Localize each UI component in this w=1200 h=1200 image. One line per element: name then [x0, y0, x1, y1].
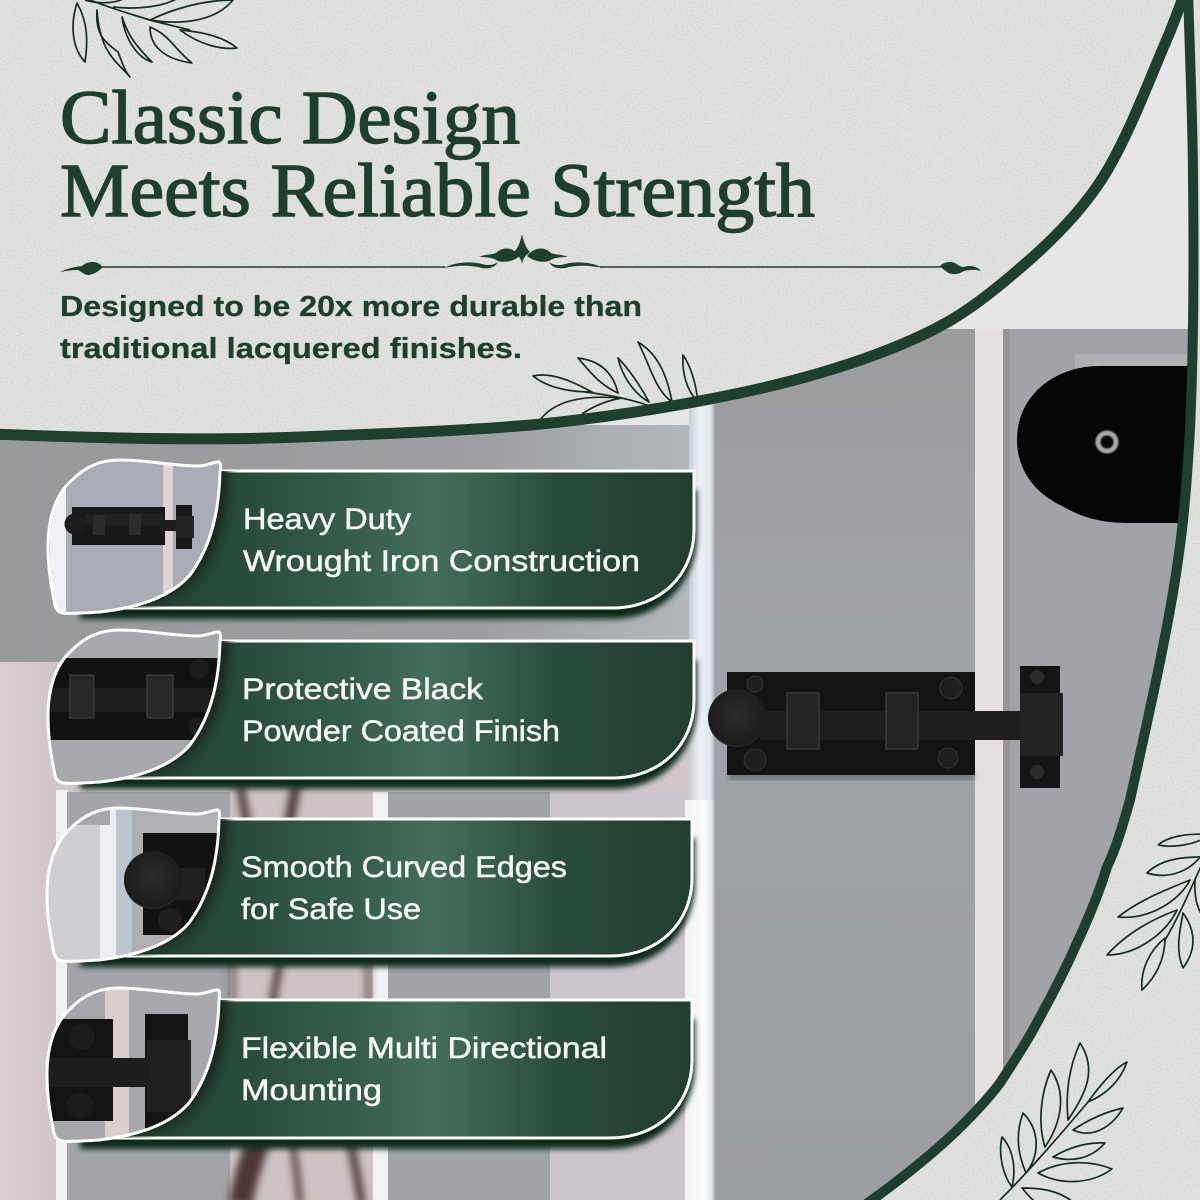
card label: Smooth Curved Edges — [241, 851, 567, 884]
light vertical door strip — [689, 395, 715, 800]
leaf inner shadow — [130, 819, 237, 956]
leaf frame — [47, 988, 220, 1141]
cream right panel — [860, 0, 1200, 1200]
subtitle: Designed to be 20x more durable than — [60, 291, 642, 323]
card label — [241, 1032, 607, 1107]
back plate — [727, 672, 975, 775]
card body — [110, 641, 694, 778]
leaf inner shadow — [122, 1000, 236, 1138]
subtitle: traditional lacquered finishes. — [60, 333, 522, 365]
left blurred pink wall — [0, 662, 695, 800]
bolt guides — [787, 693, 819, 749]
blurred plant branches — [233, 785, 368, 1200]
card shadow — [80, 660, 697, 789]
leaf inner shadow — [132, 641, 238, 778]
card body — [110, 471, 694, 608]
card label: Heavy Duty — [243, 503, 411, 536]
left lower pink column — [0, 662, 58, 1200]
card shadow — [80, 1019, 695, 1149]
card label: Wrought Iron Construction — [243, 545, 640, 578]
card label: Flexible Multi Directional — [241, 1032, 607, 1065]
card shadow — [80, 838, 695, 967]
card body — [110, 819, 692, 956]
cream header panel — [0, 0, 1200, 450]
latch shadow — [729, 772, 974, 780]
leaf frame — [48, 460, 221, 613]
leaf photo: bolt close-up — [50, 632, 219, 782]
white vertical strip mid — [373, 792, 388, 1200]
card label — [241, 851, 567, 926]
card label: Mounting — [241, 1074, 382, 1107]
blurred pink panel 2 — [550, 792, 686, 1200]
leaf frame — [47, 808, 220, 961]
bolt bar — [760, 711, 1022, 740]
card 2 — [40, 625, 697, 790]
card body — [110, 1000, 692, 1138]
knob — [708, 689, 766, 747]
title: Meets Reliable Strength — [60, 149, 815, 233]
blurred grey panel 2 — [388, 792, 550, 1200]
blurred pink panel 1 — [230, 792, 373, 1200]
leaf photo: rounded knob — [48, 810, 218, 960]
card shadow — [80, 490, 697, 619]
card 4 — [40, 983, 695, 1149]
subtitle — [60, 291, 642, 365]
card 1 — [40, 455, 697, 620]
card label: Protective Black — [242, 673, 484, 706]
leaf sprig: bottom right — [1000, 1043, 1127, 1200]
card 3 — [40, 803, 695, 970]
card label — [243, 503, 640, 578]
card label: for Safe Use — [241, 893, 421, 926]
title — [60, 76, 815, 233]
leaf sprig: right — [1107, 834, 1200, 990]
right flourish — [940, 262, 981, 274]
leaf sprig: top left — [73, 0, 237, 77]
leaf photo: latch overview — [50, 462, 219, 612]
left flourish — [60, 262, 103, 275]
grey door panel A — [715, 329, 975, 1200]
keeper — [1020, 666, 1060, 788]
leaf frame — [48, 630, 221, 783]
centre flourish — [514, 234, 530, 264]
door gap strip — [975, 329, 1003, 1200]
left blurred upper panel — [0, 425, 695, 665]
title: Classic Design — [60, 76, 520, 160]
main slide bolt latch — [708, 666, 1063, 788]
ornamental divider — [60, 234, 981, 275]
card label: Powder Coated Finish — [242, 715, 560, 748]
blurred grey panel 1 — [67, 792, 230, 1200]
white vertical strip low left — [56, 790, 68, 1200]
card label — [242, 673, 560, 748]
leaf sprig: middle, behind curve — [533, 342, 698, 420]
black wall plate with screw — [1017, 366, 1200, 523]
grey door panel B — [1010, 329, 1200, 1200]
plate screws — [744, 676, 962, 771]
leaf photo: keeper and bolt — [48, 990, 218, 1140]
leaf inner shadow — [132, 471, 238, 608]
